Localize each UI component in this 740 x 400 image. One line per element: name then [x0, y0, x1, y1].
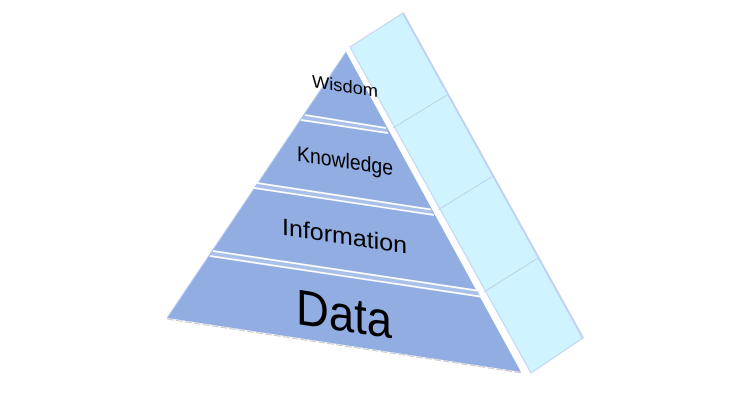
- divider: knowledge and information: [254, 183, 434, 215]
- label: Data: Data: [296, 278, 392, 349]
- divider: information and data: [210, 251, 480, 296]
- side face of pyramid: [350, 13, 583, 373]
- front face of pyramid: [167, 52, 522, 373]
- label: Information: Information: [282, 215, 407, 259]
- label: Wisdom: Wisdom: [312, 71, 378, 101]
- divider: wisdom and knowledge: [300, 114, 389, 134]
- label: Knowledge: Knowledge: [297, 141, 393, 180]
